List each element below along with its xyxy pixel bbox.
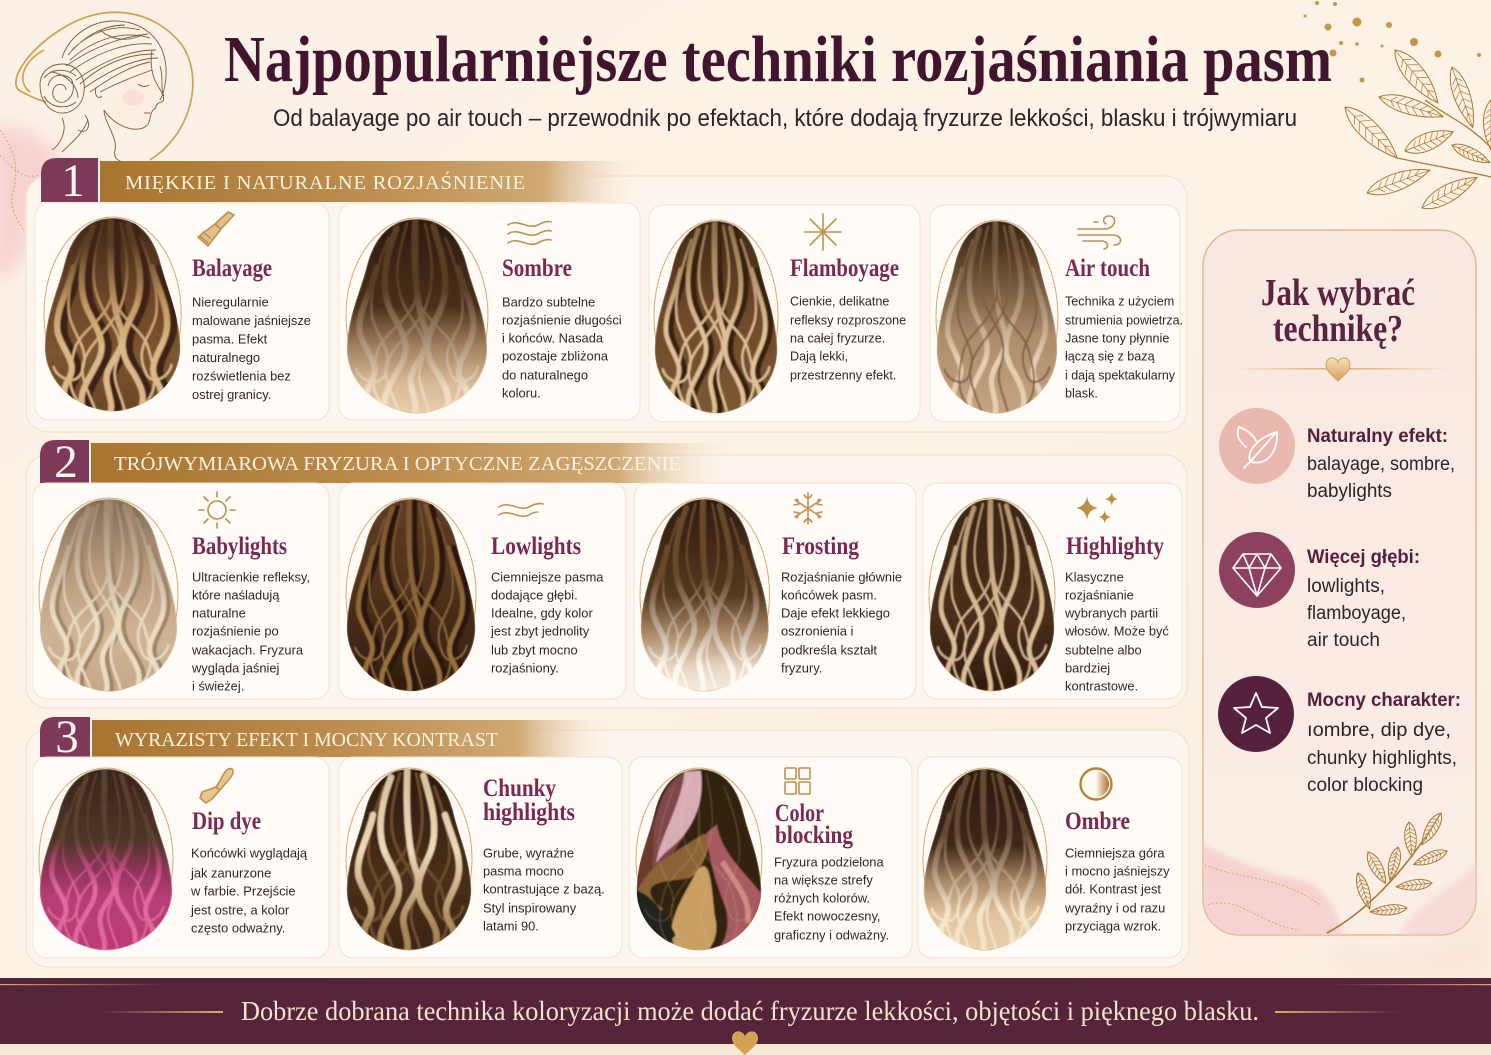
description: wybranych partii xyxy=(1064,606,1158,620)
section 3 number: 3 xyxy=(55,711,79,763)
icon: wind xyxy=(1078,216,1120,249)
description: jest ostre, a kolor xyxy=(190,902,290,918)
description: Grube, wyraźne xyxy=(483,846,574,860)
description: Ultracienkie refleksy, xyxy=(192,570,310,584)
name: Dip dye xyxy=(192,808,261,835)
section 3 background xyxy=(26,730,1189,967)
name: Babylights xyxy=(192,533,287,560)
description: wyraźny i od razu xyxy=(1064,900,1165,916)
hair: Color blocking xyxy=(636,768,762,950)
hair: Highlighty xyxy=(929,498,1055,691)
icon: brush xyxy=(198,212,234,246)
description: naturalne xyxy=(192,606,246,620)
text: Naturalny efekt: xyxy=(1307,425,1448,447)
card: Color blocking xyxy=(629,757,912,958)
section 2 number tab xyxy=(40,440,89,483)
description: pasma mocno xyxy=(483,864,564,878)
description: Dają lekki, xyxy=(790,350,848,364)
footer message: Dobrze dobrana technika koloryzacji może dodać fryzurze lekkości, objętości i pięknego blasku. xyxy=(241,996,1259,1026)
description: Klasyczne xyxy=(1065,570,1124,584)
description: ostrej granicy. xyxy=(192,387,271,402)
section 3 number tab xyxy=(40,717,90,757)
footer background xyxy=(0,978,1491,1044)
card: Highlighty xyxy=(923,483,1182,699)
card: Dip dye xyxy=(33,757,329,958)
hair: Frosting xyxy=(640,498,770,691)
description: łączą się z bazą xyxy=(1065,350,1155,364)
gold veins left xyxy=(0,130,40,232)
hair: Sombre xyxy=(346,218,488,413)
description: wakacjach. Fryzura xyxy=(191,642,304,658)
title: Najpopularniejsze techniki rozjaśniania pasm xyxy=(224,23,1332,96)
name: Ombre xyxy=(1065,808,1130,835)
icon: waves xyxy=(499,504,543,516)
description: latami 90. xyxy=(483,918,539,934)
pink watercolor wash left xyxy=(0,125,60,285)
section 2 background xyxy=(26,455,1187,708)
description: oszronienia i xyxy=(781,624,853,638)
description: i mocno jaśniejszy xyxy=(1065,864,1170,878)
description: i dają spektakularny xyxy=(1065,368,1176,382)
description: rozjaśnienie długości xyxy=(502,312,622,328)
text: babylights xyxy=(1307,481,1392,502)
description: Fryzura podzielona xyxy=(774,854,884,870)
description: kontrastujące z bazą. xyxy=(483,882,605,896)
section 3 panel xyxy=(26,711,1189,967)
text: chunky highlights, xyxy=(1307,748,1457,769)
icon: sparkles xyxy=(1076,492,1118,524)
description: dodające głębi. xyxy=(491,588,578,602)
description: rozjaśnianie xyxy=(1065,588,1134,602)
card: Balayage xyxy=(35,203,329,420)
section 1 number: 1 xyxy=(61,155,85,207)
description: Ciemniejsze pasma xyxy=(491,570,604,584)
description: często odważny. xyxy=(191,920,285,936)
description: dół. Kontrast jest xyxy=(1065,882,1161,896)
description: Cienkie, delikatne xyxy=(790,294,889,308)
card: Frosting xyxy=(634,483,916,699)
description: pasma. Efekt xyxy=(192,332,268,346)
description: które naśladują xyxy=(192,588,280,602)
description: rozświetlenia bez xyxy=(192,368,291,384)
pink marble bottom xyxy=(1203,842,1476,935)
icon: snowflake xyxy=(794,493,822,524)
item: natural effect xyxy=(1219,408,1455,502)
description: refleksy rozproszone xyxy=(790,314,906,328)
description: fryzury. xyxy=(781,660,822,676)
description: włosów. Może być xyxy=(1064,624,1169,638)
hair: Balayage xyxy=(44,217,181,412)
description: subtelne albo xyxy=(1065,642,1142,658)
footer side lines xyxy=(98,1011,1400,1013)
description: koloru. xyxy=(502,386,541,400)
text: color blocking xyxy=(1307,775,1423,796)
description: bardziej xyxy=(1065,660,1110,676)
section 2 gold bar xyxy=(91,443,730,483)
description: i świeżej. xyxy=(192,678,244,694)
description: jest zbyt jednolity xyxy=(490,624,590,638)
description: rozjaśnienie po xyxy=(192,624,279,638)
icon: squares xyxy=(785,768,810,794)
section 3 header xyxy=(40,711,610,763)
description: Ciemniejsza góra xyxy=(1065,846,1165,860)
text: Więcej głębi: xyxy=(1307,546,1420,568)
divider with heart xyxy=(1232,358,1452,381)
description: Jasne tony płynnie xyxy=(1065,332,1169,346)
hair: Flamboyage xyxy=(654,220,778,413)
description: do naturalnego xyxy=(502,368,588,382)
item: strong character xyxy=(1218,676,1461,796)
name: highlights xyxy=(483,799,575,826)
name: Flamboyage xyxy=(790,255,899,282)
section 1 heading: MIĘKKIE I NATURALNE ROZJAŚNIENIE xyxy=(125,170,525,194)
section 1 header xyxy=(41,155,640,207)
description: podkreśla kształt xyxy=(781,642,877,658)
description: Rozjaśnianie głównie xyxy=(781,570,902,584)
card: Flamboyage xyxy=(649,205,920,422)
icon: sun xyxy=(199,492,235,528)
description: rozjaśniony. xyxy=(491,660,559,676)
description: Końcówki wyglądają xyxy=(191,846,308,860)
description: lub zbyt mocno xyxy=(491,642,578,658)
name: Balayage xyxy=(192,255,272,282)
section 2 heading: TRÓJWYMIAROWA FRYZURA I OPTYCZNE ZAGĘSZCZENIE xyxy=(114,451,681,475)
footer band xyxy=(0,978,1491,1055)
description: kontrastowe. xyxy=(1065,678,1138,694)
name: Chunky xyxy=(483,775,556,802)
hair: Ombre xyxy=(923,768,1047,950)
name: Sombre xyxy=(502,255,572,282)
side panel: how to choose xyxy=(1195,230,1485,945)
description: Nieregularnie xyxy=(192,294,269,310)
description: Technika z użyciem xyxy=(1065,294,1174,308)
card: Babylights xyxy=(33,483,329,699)
section 1 panel xyxy=(26,155,1187,432)
text: lowlights, xyxy=(1307,576,1385,597)
watercolor wash lower right xyxy=(1330,890,1490,975)
section 1 number tab xyxy=(41,158,98,202)
description: jak zanurzone xyxy=(190,866,271,880)
description: przyciąga wzrok. xyxy=(1065,918,1161,934)
description: Styl inspirowany xyxy=(483,900,577,916)
icon: star circle xyxy=(1218,676,1294,752)
icon: half circle xyxy=(1080,768,1112,800)
card: Chunky highlights xyxy=(339,757,622,958)
section 2 panel xyxy=(26,436,1187,708)
text: Mocny charakter: xyxy=(1307,689,1461,711)
gold splatter xyxy=(1304,1,1481,82)
description: na całej fryzurze. xyxy=(790,332,885,346)
description: Bardzo subtelne xyxy=(502,294,595,310)
description: malowane jaśniejsze xyxy=(192,313,311,328)
icon: diamond circle xyxy=(1219,532,1295,608)
name: Lowlights xyxy=(491,533,581,560)
name: Highlighty xyxy=(1066,533,1164,560)
icon: woman portrait line art xyxy=(16,12,193,162)
section 3 heading: WYRAZISTY EFEKT I MOCNY KONTRAST xyxy=(115,729,498,751)
icon: waves xyxy=(508,222,551,244)
section 2 header xyxy=(40,436,730,488)
gold leaf branch top right xyxy=(1338,44,1491,215)
description: wygląda jaśniej xyxy=(191,660,279,676)
icon: footer heart xyxy=(732,1031,758,1055)
hair: Air touch xyxy=(936,220,1058,413)
text: air touch xyxy=(1307,630,1380,651)
card: Lowlights xyxy=(339,483,626,699)
description: blask. xyxy=(1065,386,1098,400)
section 1 background xyxy=(26,176,1187,432)
description: na większe strefy xyxy=(774,872,873,888)
card: Sombre xyxy=(339,203,640,420)
card: Ombre xyxy=(918,757,1182,958)
hair: Babylights xyxy=(39,498,178,691)
description: przestrzenny efekt. xyxy=(790,368,896,382)
item: more depth xyxy=(1219,532,1420,651)
description: pozostaje zbliżona xyxy=(502,348,609,364)
side heading: Jak wybrać xyxy=(1261,272,1415,314)
description: Idealne, gdy kolor xyxy=(491,606,593,620)
description: Efekt nowoczesny, xyxy=(774,908,881,924)
text: ıombre, dip dye, xyxy=(1307,720,1451,741)
hair: Chunky highlights xyxy=(346,768,472,950)
name: Color xyxy=(775,800,824,827)
name: Frosting xyxy=(782,533,859,560)
section 1 gold bar xyxy=(100,161,640,202)
section 2 number: 2 xyxy=(54,436,78,488)
description: w farbie. Przejście xyxy=(190,884,296,898)
description: końcówek pasm. xyxy=(781,588,877,602)
hair: Dip dye xyxy=(39,768,173,950)
card: Air touch xyxy=(930,205,1183,422)
footer top gold lines xyxy=(0,984,1491,985)
hair: Lowlights xyxy=(346,498,476,691)
name: Air touch xyxy=(1065,255,1150,282)
description: naturalnego xyxy=(192,350,260,365)
side panel background xyxy=(1203,230,1476,935)
description: różnych kolorów. xyxy=(774,890,870,906)
icon: leaf circle xyxy=(1219,408,1295,484)
gold sprig xyxy=(1327,810,1449,933)
description: Daje efekt lekkiego xyxy=(781,606,890,620)
description: strumienia powietrza. xyxy=(1065,314,1183,328)
name: blocking xyxy=(775,822,853,849)
icon: brush xyxy=(200,769,233,803)
section 3 gold bar xyxy=(92,720,610,757)
description: graficzny i odważny. xyxy=(774,928,889,942)
side heading: technikę? xyxy=(1273,308,1403,350)
text: balayage, sombre, xyxy=(1307,454,1455,475)
description: i końców. Nasada xyxy=(502,330,604,346)
icon: starburst xyxy=(805,214,841,250)
footer base strip xyxy=(0,1044,1491,1055)
subtitle: Od balayage po air touch – przewodnik po efektach, które dodają fryzurze lekkości, blasku i trójwymiaru xyxy=(273,105,1297,132)
text: flamboyage, xyxy=(1307,603,1406,624)
